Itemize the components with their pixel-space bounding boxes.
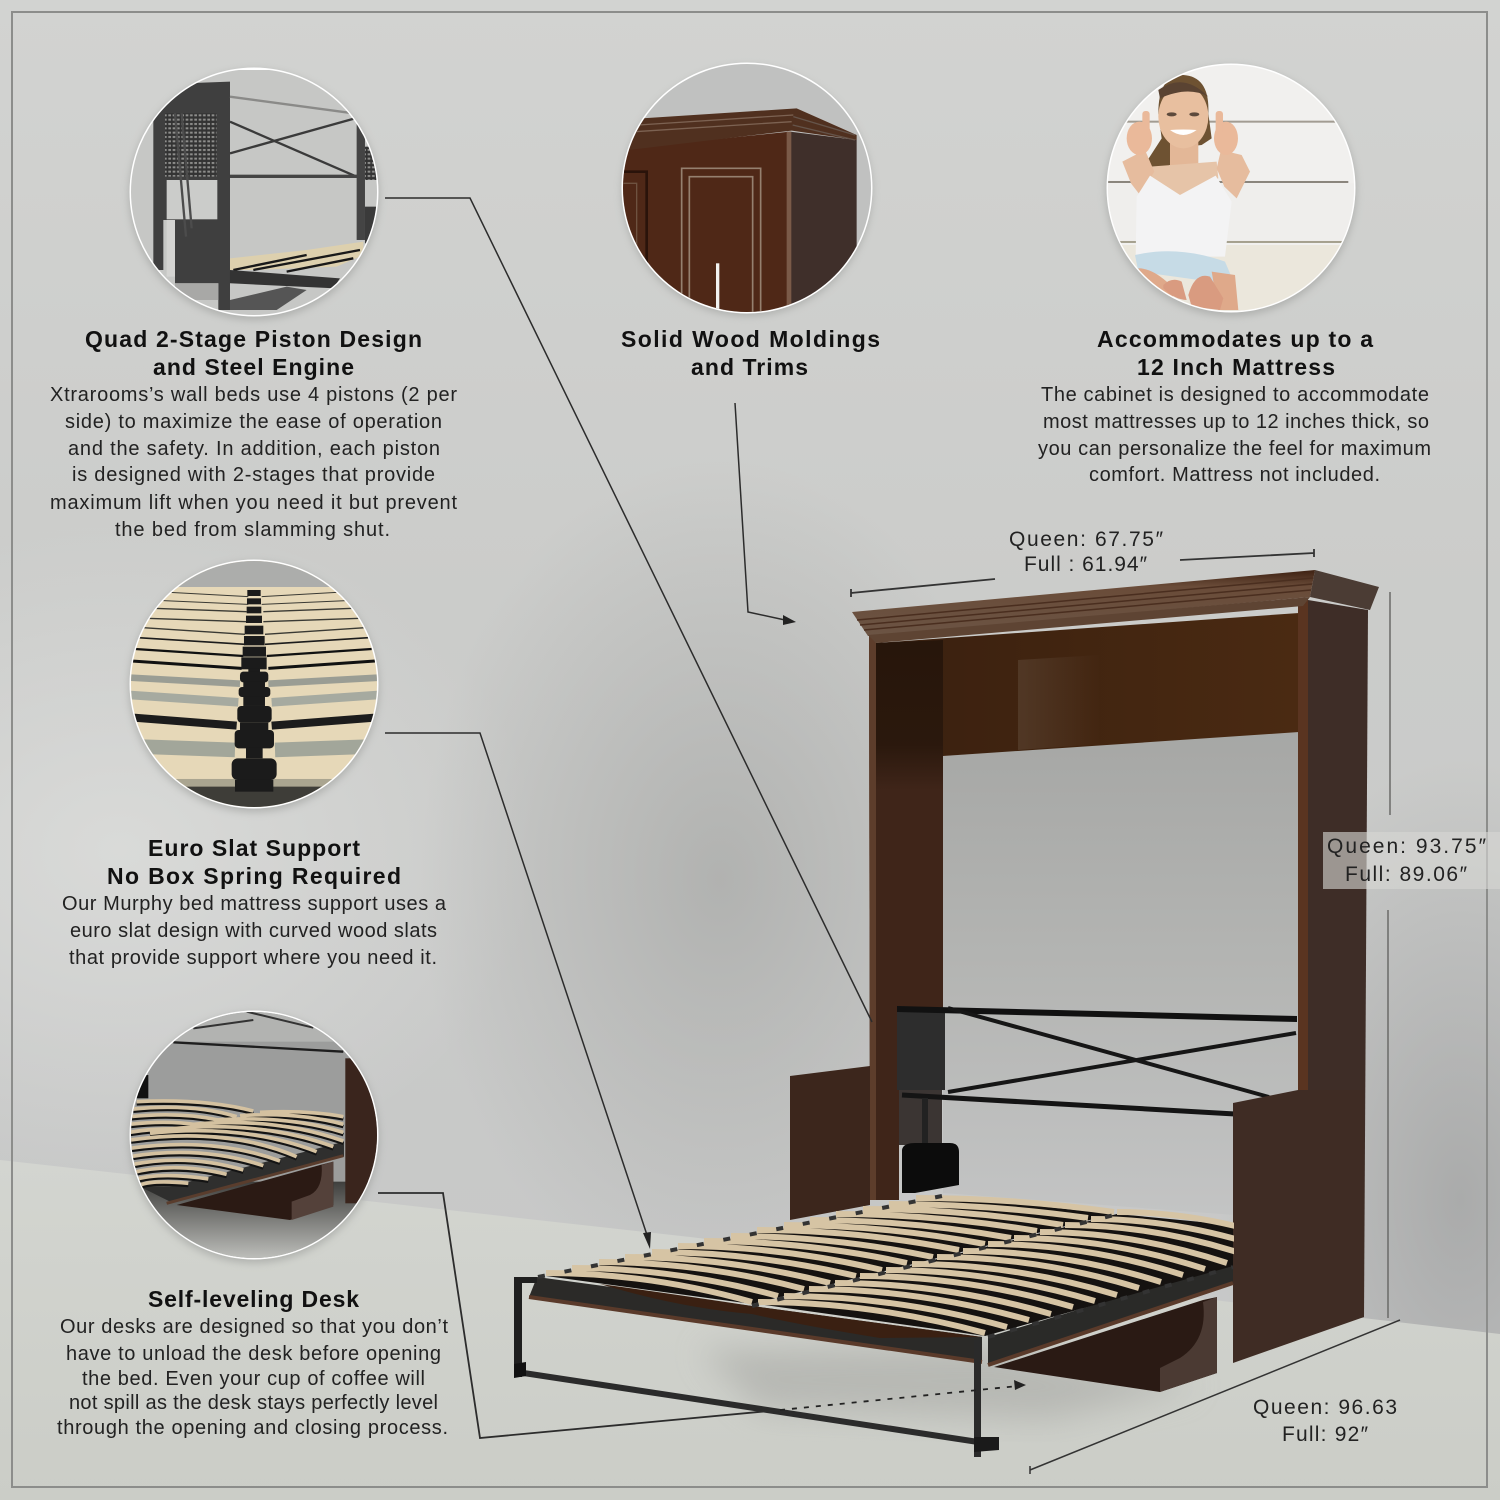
woman (1122, 75, 1250, 310)
dimension lines (851, 549, 1400, 1474)
text: euro slat heading (107, 835, 401, 889)
pillar edge strip (869, 635, 876, 1200)
text: piston description: the bed from slamming shut. (115, 519, 390, 541)
fascia under crown (868, 597, 1310, 643)
text: desk heading: Self-leveling Desk (148, 1286, 359, 1312)
dimension label: height: Queen: 93.75″ (1327, 835, 1487, 858)
leader line: piston (385, 198, 872, 1022)
text: mattress description (1038, 384, 1431, 486)
desk under bed (994, 1297, 1217, 1392)
cabinet right side (1306, 600, 1368, 1330)
text: piston description: Xtrarooms’s wall beds use 4 pistons (2 per (50, 384, 457, 406)
right half slats (758, 1212, 1293, 1333)
callout circle: euro slats (120, 555, 390, 815)
text: mattress description: most mattresses up to 12 inches thick, so (1043, 411, 1429, 433)
text: desk description (57, 1316, 448, 1439)
callout circle: crown molding (610, 60, 880, 320)
left half slats (546, 1198, 1114, 1302)
cabinet right front strip (1298, 598, 1308, 1100)
text: piston description: side) to maximize the ease of operation (65, 411, 442, 433)
pillar inner shade (876, 640, 943, 790)
cabinet left pillar (869, 635, 943, 1200)
slat end tabs (538, 1196, 1233, 1337)
crown molding (852, 570, 1315, 636)
text: euro slat description: euro slat design with curved wood slats (70, 920, 437, 942)
dimension label: height: Full: 89.06″ (1345, 863, 1468, 886)
text: mattress description: comfort. Mattress not included. (1089, 464, 1380, 486)
cabinet opening wall (943, 730, 1299, 1215)
text: moldings heading: Solid Wood Moldings (621, 326, 880, 352)
text: euro slat heading: Euro Slat Support (148, 835, 360, 861)
left wing panel (790, 1066, 870, 1220)
crown side (1310, 570, 1379, 610)
text: mattress heading: 12 Inch Mattress (1137, 354, 1335, 380)
metal frame (897, 1006, 1297, 1193)
text: euro slat description: Our Murphy bed mattress support uses a (62, 893, 447, 915)
text: mattress description: you can personalize the feel for maximum (1038, 438, 1431, 460)
arrow: moldings (735, 403, 796, 625)
text: mattress heading: Accommodates up to a (1097, 326, 1373, 352)
text: desk description: through the opening and closing process. (57, 1417, 448, 1439)
callout circle: piston design (120, 68, 390, 323)
text: desk description: the bed. Even your cup of coffee will (82, 1368, 425, 1390)
text: piston heading: and Steel Engine (153, 354, 354, 380)
dimension label: width (1009, 528, 1164, 576)
dimension label: depth: Full: 92″ (1282, 1423, 1369, 1446)
arrow: euro slat (385, 733, 651, 1249)
text: piston description: maximum lift when you need it but prevent (50, 492, 457, 514)
text: moldings heading (621, 326, 880, 380)
text: desk description: Our desks are designed so that you don’t (60, 1316, 448, 1338)
text: piston heading: Quad 2-Stage Piston Design (85, 326, 422, 352)
deck underlay (546, 1196, 1233, 1338)
bed frame rails (529, 1263, 1233, 1365)
text: piston description (50, 384, 457, 541)
callout circle: desk (120, 1005, 390, 1265)
cabinet back header panel (876, 613, 1299, 756)
dimension label: depth (1253, 1396, 1397, 1446)
dimension label: width: Full : 61.94″ (1024, 553, 1148, 576)
dimension label: height (1323, 832, 1500, 889)
text: euro slat description: that provide support where you need it. (69, 947, 437, 969)
text: piston description: and the safety. In addition, each piston (68, 438, 440, 460)
callout circle: woman with mattress (1095, 55, 1365, 316)
back panel highlight (1018, 655, 1100, 750)
dimension label: depth: Queen: 96.63 (1253, 1396, 1397, 1419)
text: euro slat heading: No Box Spring Required (107, 863, 401, 889)
text: piston description: is designed with 2-stages that provide (72, 464, 435, 486)
text: euro slat description (62, 893, 447, 969)
bed legs and foot bar (514, 1277, 999, 1457)
text: moldings heading: and Trims (691, 354, 808, 380)
text: desk description: have to unload the desk before opening (66, 1343, 441, 1365)
murphy bed illustration (514, 570, 1379, 1457)
text: desk description: not spill as the desk stays perfectly level (69, 1392, 438, 1414)
text: mattress description: The cabinet is designed to accommodate (1041, 384, 1429, 406)
text: piston heading (85, 326, 422, 380)
dimension label: width: Queen: 67.75″ (1009, 528, 1164, 551)
text: mattress heading (1097, 326, 1373, 380)
right wing panel (1233, 1090, 1364, 1363)
arrow: self-leveling desk (378, 1193, 1026, 1438)
